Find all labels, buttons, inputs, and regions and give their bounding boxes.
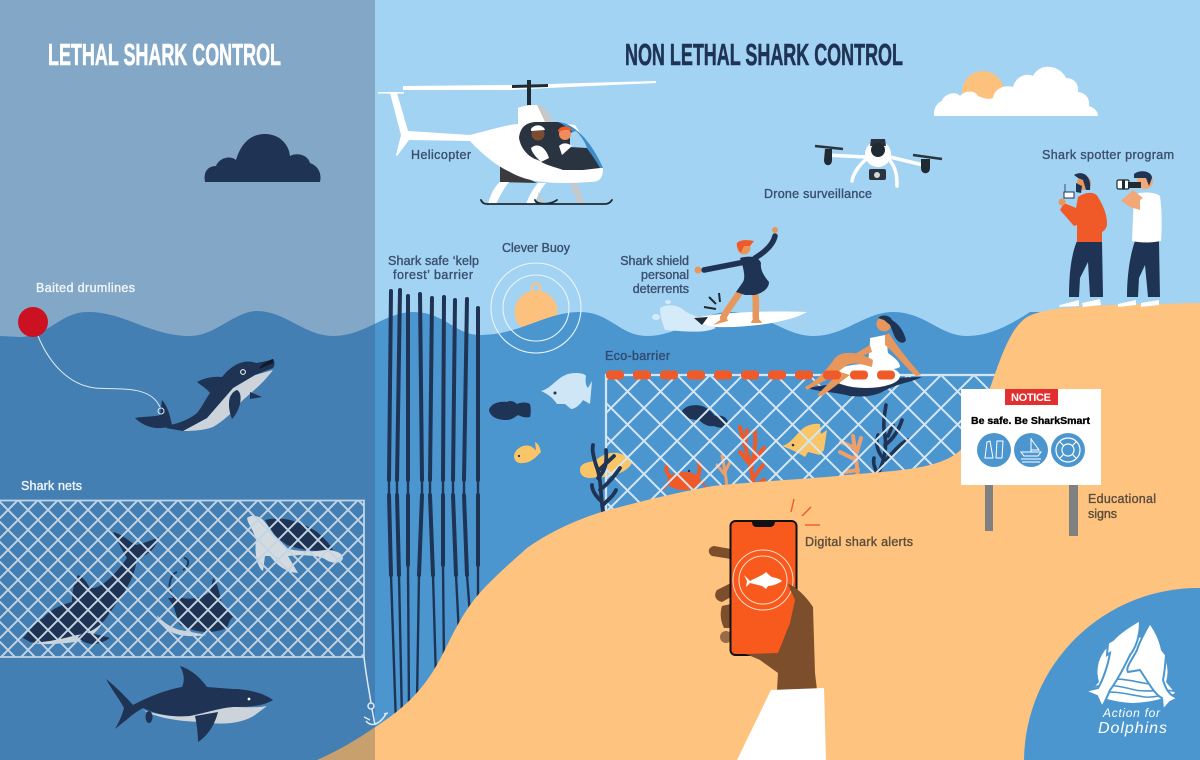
fish: pale angelfish (541, 373, 592, 409)
label: shark nets: Shark nets (21, 479, 82, 493)
heading: non lethal shark control: NON LETHAL SHARK CONTROL (625, 37, 903, 72)
helicopter (378, 80, 656, 204)
label: shark shield personal deterrents: personal (641, 268, 689, 282)
phone alert rays (791, 499, 820, 525)
label: kelp forest barrier: Shark safe ‘kelp (388, 254, 479, 268)
logo wordmark (1098, 706, 1167, 737)
coral: light orange (717, 456, 730, 488)
seaweed: dark right (874, 405, 908, 476)
label: educational signs: signs (1088, 507, 1117, 521)
fish: small gold fish (514, 442, 541, 463)
logo wordmark: Dolphins (1098, 720, 1167, 737)
great white shark (106, 666, 273, 742)
label: shark shield personal deterrents: Shark shield (620, 254, 689, 268)
icon: sun and white cloud (934, 67, 1098, 116)
eco-barrier floats (606, 370, 895, 380)
label: kelp forest barrier: forest’ barrier (393, 268, 473, 282)
fish: yellow angelfish (782, 424, 827, 457)
label: helicopter: Helicopter (411, 148, 471, 162)
fish: dark clownfish in net (682, 405, 728, 428)
label: educational signs (1088, 492, 1156, 521)
coral: salmon (840, 436, 861, 478)
clever buoy signal rings (491, 263, 581, 353)
fish: dark clownfish (489, 401, 531, 420)
logo: action for dolphins (1024, 588, 1200, 760)
label: digital shark alerts: Digital shark alerts (805, 535, 913, 549)
notice sign: Be safe. Be SharkSmart (971, 415, 1090, 427)
label: shark shield personal deterrents: deterrents (633, 282, 689, 296)
net anchor (364, 657, 388, 725)
white sleeve (737, 688, 826, 760)
label: baited drumlines: Baited drumlines (36, 281, 135, 295)
logo wordmark: Action for (1102, 706, 1161, 720)
heading: lethal shark control: LETHAL SHARK CONTROL (48, 37, 281, 72)
label: educational signs: Educational (1088, 492, 1156, 506)
woman on swim ring (805, 316, 922, 397)
label: shark spotter program: Shark spotter program (1042, 148, 1174, 162)
shark spotter person with binoculars (1117, 171, 1162, 307)
background: sand (317, 303, 1200, 760)
dolphin on drumline (135, 359, 274, 431)
logo emblem (1085, 620, 1178, 710)
notice sign (961, 389, 1101, 536)
icon: clever buoy ball (514, 284, 558, 334)
hand holding phone with shark alert (709, 521, 817, 690)
fish: striped fish (580, 453, 632, 478)
shark net with entangled animals (0, 500, 364, 657)
label: eco-barrier: Eco-barrier (605, 349, 670, 363)
entangled turtle (247, 516, 343, 573)
icon: dark cloud (205, 134, 321, 182)
background: ocean (0, 311, 1040, 760)
surfer (652, 227, 807, 332)
entangled ray (157, 558, 233, 636)
drumline float and line (18, 307, 160, 407)
seaweed: dark left (592, 445, 620, 511)
kelp forest barrier (389, 290, 478, 725)
label: shark shield personal deterrents (620, 254, 689, 296)
crab (663, 463, 706, 490)
label: clever buoy: Clever Buoy (502, 241, 571, 255)
entangled dolphin (23, 532, 159, 644)
label: drone surveillance: Drone surveillance (764, 187, 872, 201)
label: kelp forest barrier (388, 254, 479, 282)
eco-barrier net (606, 375, 1006, 515)
coral: orange branch (740, 427, 764, 488)
drone (815, 139, 942, 186)
notice sign: NOTICE (1011, 392, 1051, 404)
shark spotter person with controller (1058, 173, 1107, 307)
